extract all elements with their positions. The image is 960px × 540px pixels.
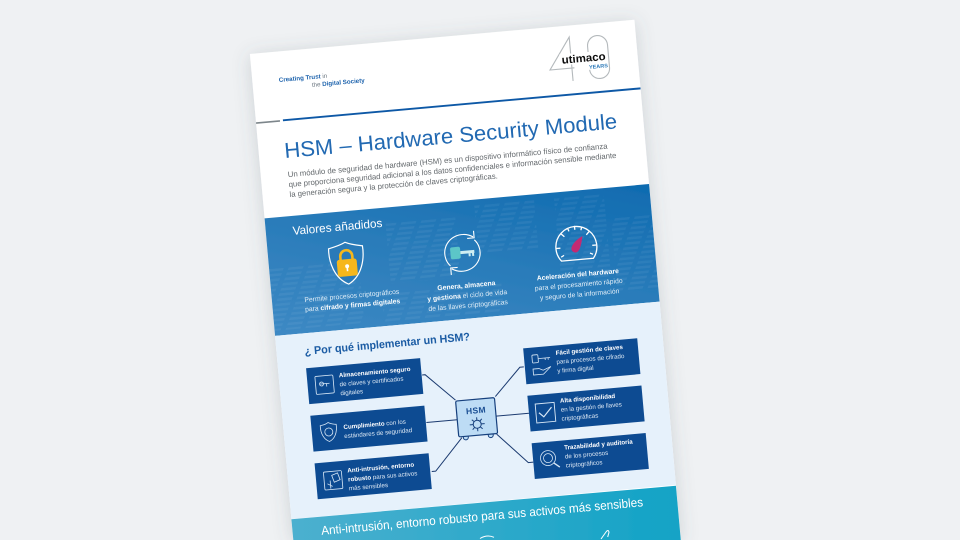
- text: aceleración del hardware: y seguro de la información: [540, 288, 620, 302]
- box: anti-intrusión: [315, 453, 432, 499]
- header tagline: the Digital Society: [312, 77, 366, 89]
- connector lines: [422, 366, 533, 472]
- panel: valores añadidos: [265, 184, 660, 336]
- utimaco 40 years logo: utimaco: [561, 51, 606, 67]
- icon: partial arc: [480, 536, 494, 538]
- box: alta disponibilidad: [527, 386, 645, 432]
- page sheet: [250, 20, 681, 540]
- text: procesos criptográficos: para cifrado y firmas digitales: [305, 298, 401, 314]
- icon: check box: [535, 402, 556, 423]
- header tagline: Creating Trust in: [279, 73, 328, 84]
- panel: anti-intrusión band: [291, 486, 681, 540]
- box: cumplimiento: [310, 406, 428, 452]
- icon: speed gauge: [554, 224, 598, 262]
- utimaco 40 years logo: YEARS: [589, 63, 609, 71]
- intro paragraph: que proporciona seguridad adicional a los datos confidenciales e información sensible mediante: [288, 151, 617, 189]
- box: almacenamiento seguro: Almacenamiento seguro: [339, 366, 411, 379]
- box: trazabilidad: criptográficos: [565, 459, 603, 470]
- title: HSM – Hardware Security Module: [283, 109, 618, 163]
- heading: por qué implementar: ¿ Por qué implementar un HSM?: [304, 331, 471, 358]
- hsm safe: HSM: [466, 404, 486, 416]
- box: anti-intrusión: más sensibles: [349, 482, 388, 492]
- text: aceleración del hardware: [534, 268, 624, 303]
- box: alta disponibilidad: criptográficas: [561, 412, 599, 423]
- box: alta disponibilidad: en la gestión de llaves: [561, 401, 622, 414]
- text: procesos criptográficos: [304, 289, 401, 314]
- text: genera, almacena: de las llaves criptográficas: [428, 299, 509, 313]
- box: fácil gestión: para procesos de cifrado: [556, 353, 625, 366]
- intro paragraph: Un módulo de seguridad de hardware (HSM) es un dispositivo informático físico de confianza: [287, 142, 609, 179]
- icon: seal shield: [320, 422, 338, 442]
- icon: key in cycle arrows: [443, 230, 482, 275]
- header rule: [256, 87, 641, 124]
- box: trazabilidad: de los procesos: [565, 450, 608, 461]
- box: trazabilidad: Trazabilidad y auditoría: [564, 438, 634, 452]
- box: fácil gestión: [523, 338, 640, 384]
- hsm safe: [456, 398, 498, 440]
- heading: anti-intrusión: Anti-intrusión, entorno robusto para sus activos más sensibles: [321, 495, 644, 538]
- icon: shield with padlock: [328, 241, 366, 286]
- box: anti-intrusión: robusto para sus activos: [348, 470, 418, 483]
- text: procesos criptográficos: Permite procesos criptográficos: [304, 289, 400, 304]
- icon: magnifier: [540, 450, 560, 469]
- utimaco 40 years logo: [547, 34, 610, 83]
- box: cumplimiento: estándares de seguridad: [344, 427, 413, 440]
- heading: valores añadidos: Valores añadidos: [292, 216, 383, 238]
- text: aceleración del hardware: Aceleración del hardware: [537, 268, 619, 282]
- header tagline: [279, 69, 366, 92]
- box: almacenamiento seguro: digitales: [340, 388, 363, 397]
- icon: key and hand: [532, 354, 552, 375]
- box: alta disponibilidad: Alta disponibilidad: [560, 393, 616, 405]
- box: anti-intrusión: Anti-intrusión, entorno: [347, 462, 415, 474]
- icon: secured safe: [323, 471, 343, 490]
- text: genera, almacena: Genera, almacena: [437, 280, 496, 292]
- box: fácil gestión: Fácil gestión de claves: [555, 344, 624, 357]
- page content: [251, 31, 681, 540]
- upper document content: [251, 31, 676, 519]
- panel: por qué implementar: [275, 302, 676, 519]
- text: genera, almacena: [426, 279, 509, 313]
- icon: partial thumb: [601, 530, 609, 539]
- intro paragraph: la generación segura y la protección de claves criptográficas.: [289, 171, 498, 199]
- box: trazabilidad: [532, 433, 649, 479]
- icon: key safe: [315, 375, 334, 394]
- text: aceleración del hardware: para el procesamiento rápido: [535, 278, 623, 293]
- intro paragraph: [287, 141, 618, 199]
- box: almacenamiento seguro: [306, 358, 423, 404]
- box: almacenamiento seguro: de claves y certificados: [339, 376, 404, 388]
- box: fácil gestión: y firma digital: [557, 365, 594, 375]
- box: cumplimiento: Cumplimiento con los: [343, 419, 406, 431]
- text: genera, almacena: y gestiona el ciclo de vida: [427, 289, 508, 303]
